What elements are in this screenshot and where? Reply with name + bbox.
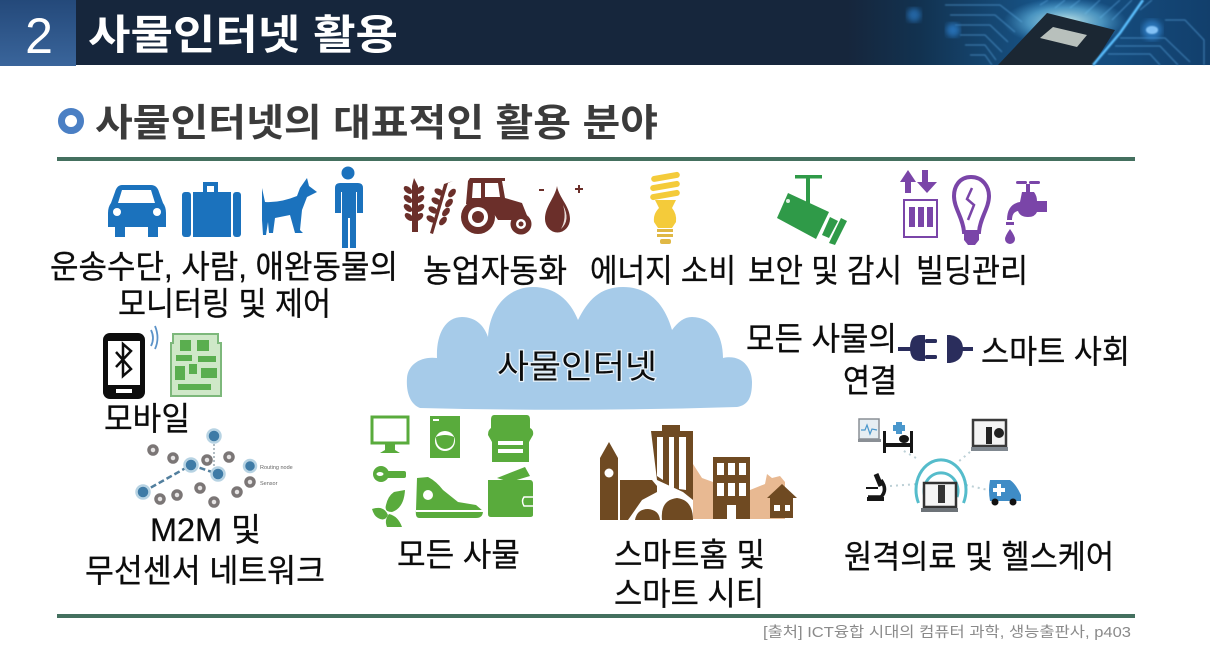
label: smart society: 스마트 사회	[981, 334, 1130, 370]
label: connect all things: 연결	[843, 363, 897, 399]
icons: agriculture	[402, 178, 583, 234]
icon: smart city skyline	[600, 425, 797, 520]
icon: monitor	[372, 417, 408, 453]
clock tower	[600, 442, 618, 520]
label: mobile: 모바일	[104, 401, 190, 437]
icons: all things	[372, 415, 533, 527]
icon: washing machine	[430, 416, 460, 458]
icon: energy saving bulb	[650, 171, 680, 244]
label: transport monitoring: 운송수단, 사람, 애완동물의	[50, 249, 398, 285]
icon: ambulance	[989, 480, 1021, 506]
cloud	[407, 287, 752, 410]
icon: suitcase	[182, 182, 241, 237]
label: connect all things: 모든 사물의	[746, 321, 897, 357]
label: building management: 빌딩관리	[916, 253, 1028, 289]
circuit chip image	[907, 0, 1204, 65]
label: M2M and wireless sensor network: 무선센서 네트워크	[85, 553, 325, 589]
header banner	[0, 0, 1210, 66]
icon: power plug	[898, 335, 973, 363]
icon: tractor	[461, 178, 532, 234]
icon: microscope	[866, 474, 884, 501]
icon: wallet	[488, 467, 533, 517]
subheading text: 사물인터넷의 대표적인 활용 분야	[95, 103, 658, 145]
label: security: 보안 및 감시	[748, 253, 902, 289]
icon: circuit board	[171, 334, 221, 396]
section number: 2	[25, 8, 53, 64]
label: smart home and smart city: 스마트 시티	[614, 576, 764, 612]
domes	[635, 509, 660, 520]
section number	[0, 0, 76, 66]
label: connect all things	[746, 321, 897, 399]
apartment building	[713, 457, 750, 519]
routing nodes	[136, 430, 256, 498]
icon: smartphone with bluetooth	[103, 326, 158, 399]
label: transport monitoring: 모니터링 및 제어	[118, 286, 331, 322]
icon: monitor laptop	[858, 419, 881, 442]
label: agriculture: 농업자동화	[423, 253, 567, 289]
label: M2M and wireless sensor network: M2M 및	[150, 512, 261, 548]
icon: hospital bed	[883, 422, 913, 453]
source citation: [출처] ICT융합 시대의 컴퓨터 과학, 생능출판사, p403	[763, 624, 1131, 641]
icons: transport, people, pets	[108, 166, 363, 248]
label: M2M and wireless sensor network	[85, 512, 325, 589]
icons: building management	[900, 170, 1047, 245]
church body	[620, 480, 657, 520]
icon: security camera	[777, 175, 847, 245]
icon: dog	[262, 178, 317, 235]
M2M sensor network diagram: Routing node	[260, 465, 293, 471]
M2M sensor network diagram: Sensor	[260, 481, 278, 487]
label: smart home and smart city: 스마트홈 및	[614, 537, 765, 573]
icon: key	[373, 466, 406, 482]
icon: water tap	[1005, 181, 1047, 244]
icon: sprout	[372, 490, 405, 527]
icon: person	[335, 166, 363, 248]
icon: light bulb	[954, 177, 989, 245]
house	[767, 484, 797, 518]
icon: elevator	[900, 170, 937, 237]
subheading	[62, 103, 658, 145]
icon: wheat	[402, 178, 458, 234]
telehealth diagram	[858, 419, 1021, 512]
label: telemedicine and healthcare: 원격의료 및 헬스케어	[844, 539, 1114, 575]
label: all things: 모든 사물	[397, 537, 520, 573]
M2M sensor network diagram	[136, 430, 293, 506]
background skyline	[693, 464, 785, 519]
icon: central laptop with signal arcs	[916, 460, 966, 512]
icon: water drop	[539, 185, 583, 233]
sensor nodes	[149, 446, 254, 506]
label: energy: 에너지 소비	[590, 253, 736, 289]
bullet ring	[62, 112, 80, 130]
icon: sneaker	[416, 477, 483, 518]
icon: armchair	[488, 415, 533, 462]
tall columns	[651, 425, 693, 500]
title: 사물인터넷 활용	[88, 12, 398, 58]
icon: doctor laptop	[971, 420, 1008, 451]
label: internet of things: 사물인터넷	[497, 348, 657, 385]
label: transport monitoring	[50, 249, 398, 322]
icon: car	[108, 185, 166, 237]
label: smart home and smart city	[614, 537, 765, 612]
